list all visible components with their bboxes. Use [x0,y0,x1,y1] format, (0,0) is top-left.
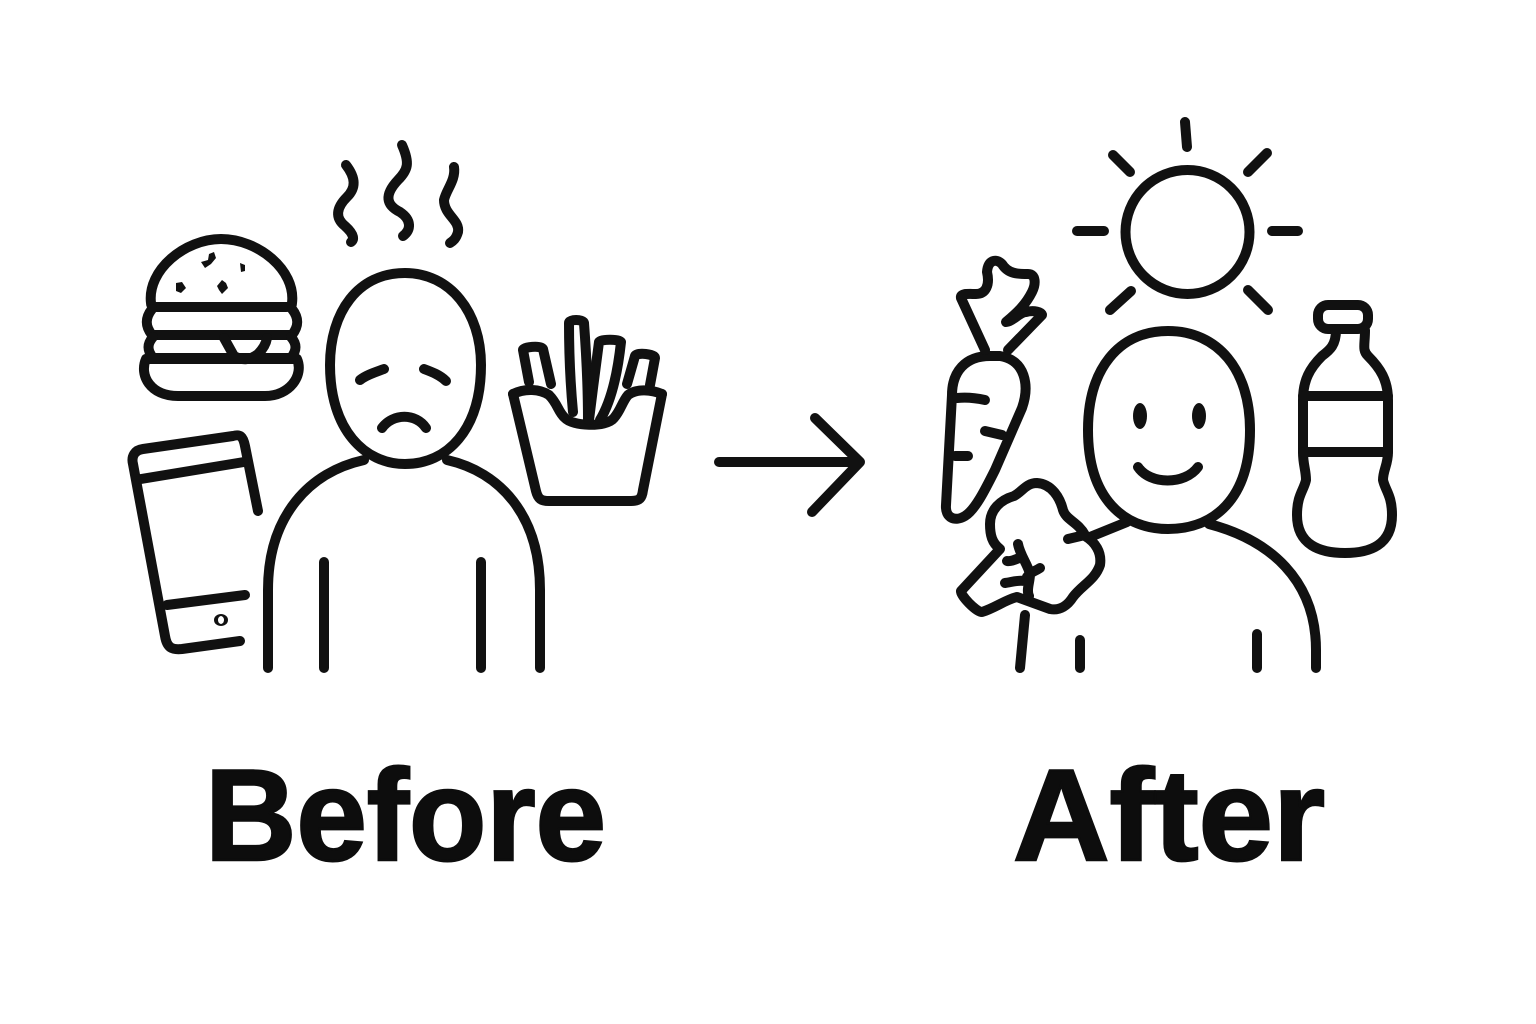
sad face [360,369,446,428]
icon: sun [1077,122,1298,310]
icon: smartphone [132,435,258,649]
icon: burger [144,239,299,396]
icon: broccoli [961,483,1100,612]
character: body [268,460,540,668]
happy face [1133,403,1206,480]
character: happy head [1088,331,1250,529]
icon: steam lines [338,145,458,243]
icon: carrot [946,261,1042,519]
burger seeds [176,252,245,294]
arrow [719,418,860,512]
icon: french fries [513,320,662,501]
icon: water bottle [1297,305,1392,553]
heading: After: After [1013,742,1325,888]
character: sad head [330,273,481,464]
character: body [1020,522,1316,668]
panel: before figure [132,145,662,668]
panel: after figure [946,122,1392,668]
heading: Before: Before [205,742,606,888]
